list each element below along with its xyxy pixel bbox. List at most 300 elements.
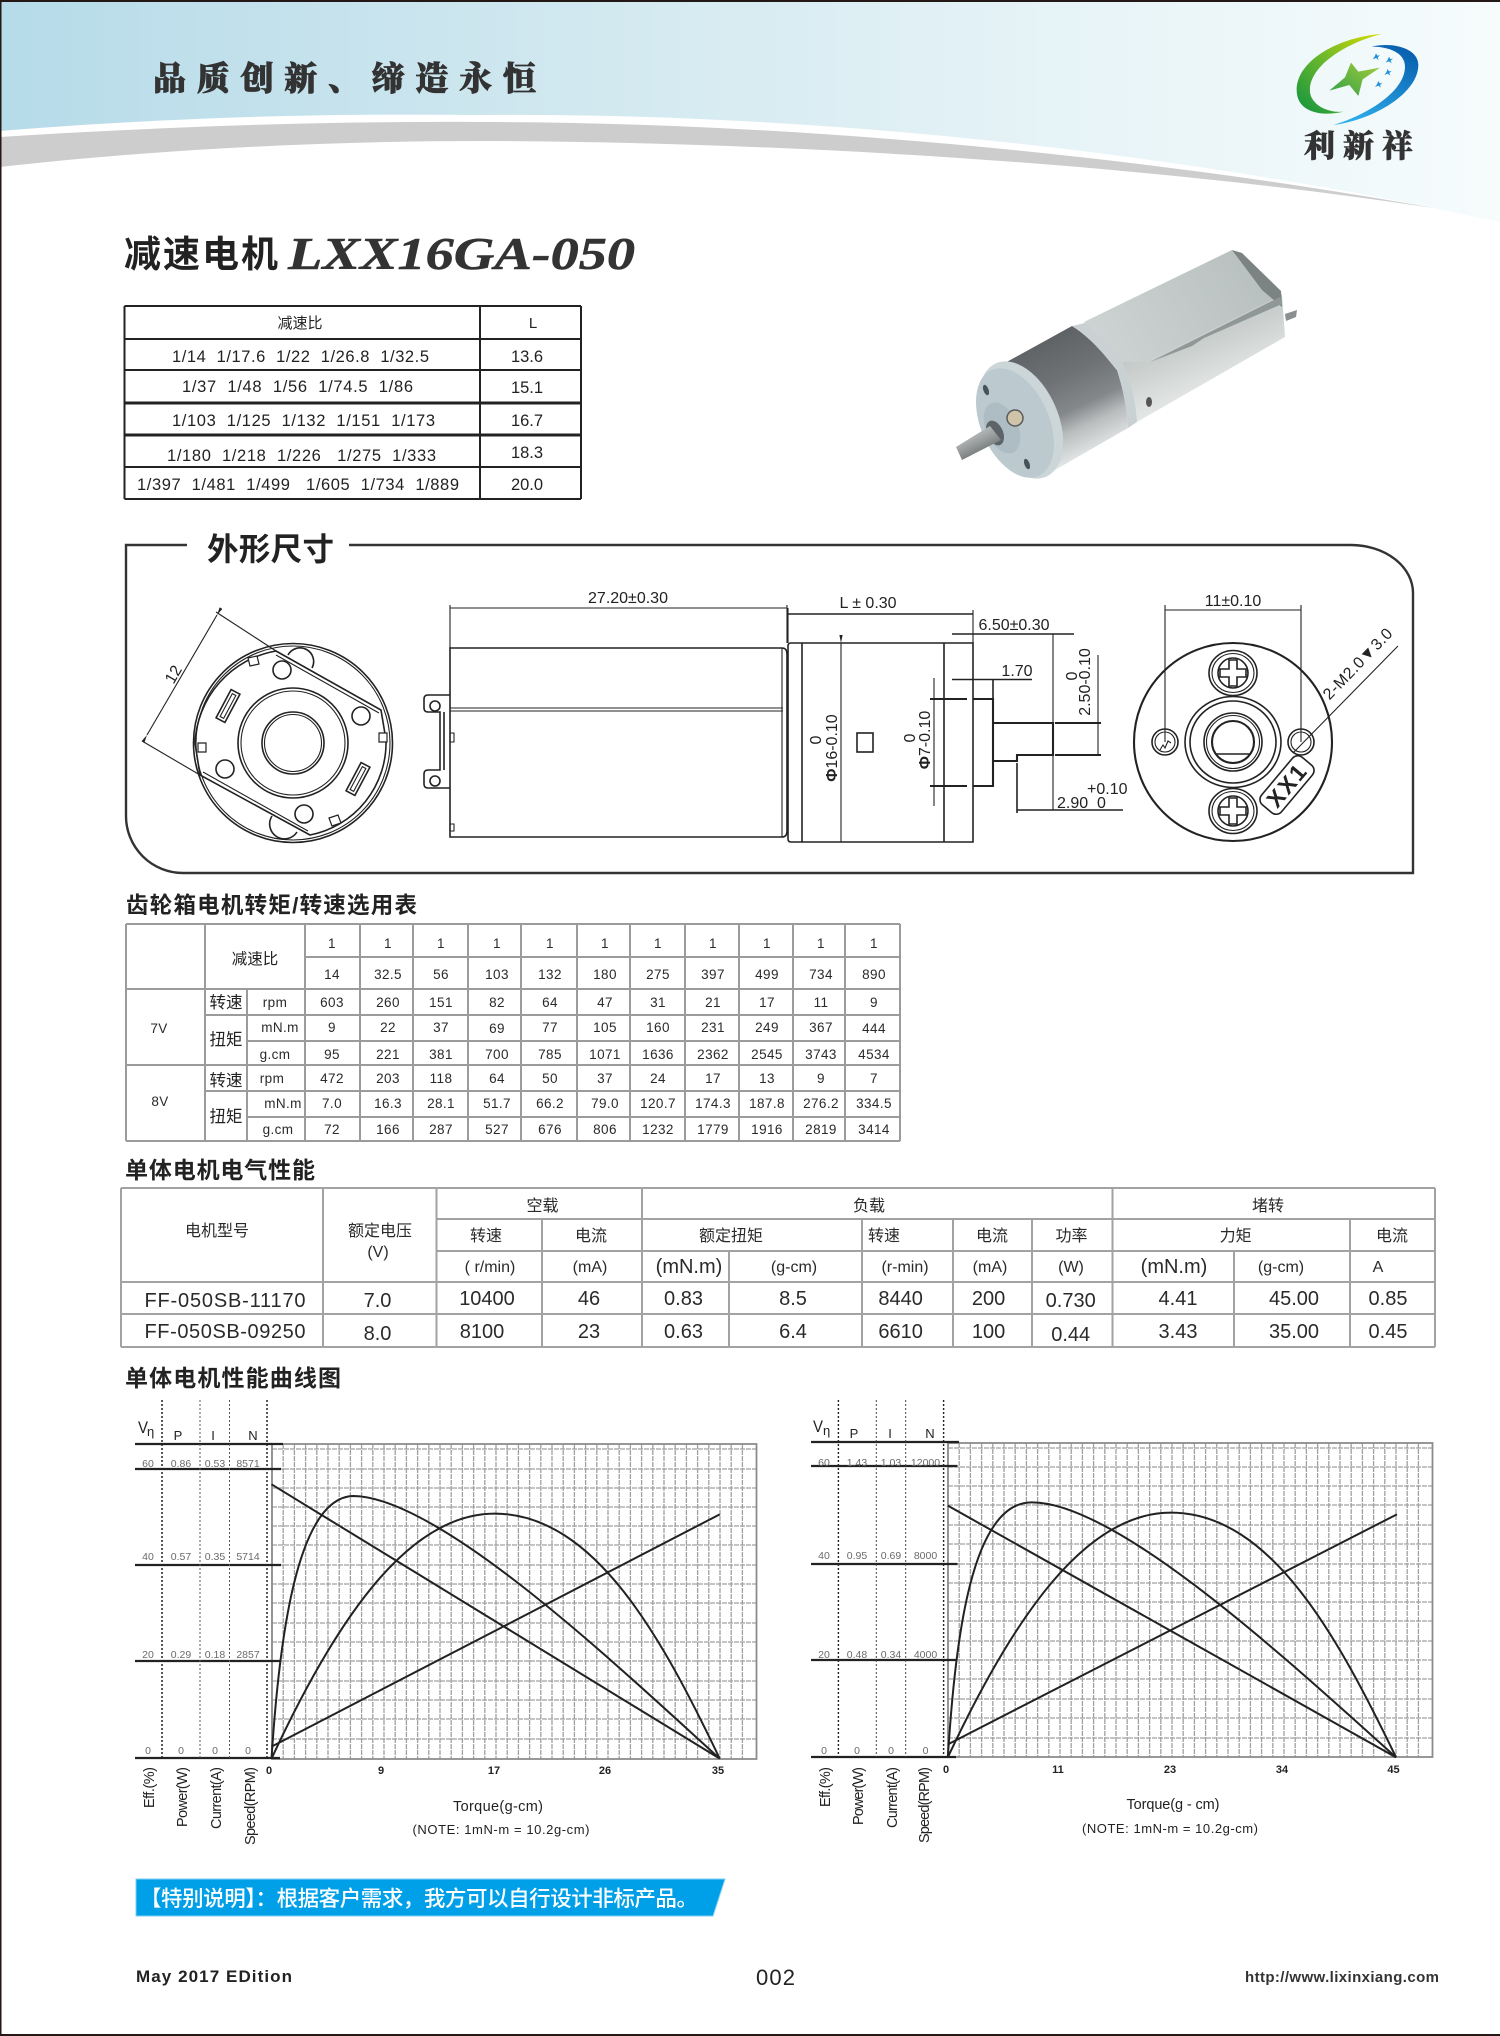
- photo: shaft: [956, 426, 1001, 460]
- table header: [277, 315, 537, 332]
- photo: rear dark edge: [1232, 250, 1282, 307]
- scale labels: [813, 1417, 940, 1757]
- scale labels: 0: [854, 1745, 860, 1757]
- rotated axis names: Current(A): [885, 1767, 901, 1828]
- scale labels: 0: [923, 1745, 929, 1757]
- row: FF-050SB-11170: [144, 1288, 1407, 1312]
- row: FF-050SB-11170: 200: [972, 1288, 1005, 1310]
- rows: 8V: 118: [430, 1071, 452, 1086]
- table header: ratios: 56: [433, 967, 449, 982]
- row: FF-050SB-11170: 0.730: [1046, 1290, 1096, 1312]
- table rows: 1/14 1/17.6 1/22 1/26.8 1/32.5: [172, 348, 429, 366]
- table header: ratios: 397: [701, 967, 725, 982]
- photo: mounting hole lower: [1023, 458, 1031, 470]
- torque axis ticks: 45: [1387, 1764, 1400, 1776]
- rows: 7V: 2545: [751, 1047, 783, 1062]
- scale labels: V: [813, 1417, 824, 1436]
- table header: ratios: 890: [862, 967, 886, 982]
- heading: gearbox selection table: 齿轮箱电机转矩/转速选用表: [126, 893, 417, 918]
- table header: ratios: 1: [546, 936, 554, 951]
- scale labels: 8571: [236, 1458, 260, 1470]
- scale labels: 60: [818, 1457, 830, 1469]
- torque axis ticks: [266, 1765, 724, 1777]
- slogan: 品质创新、缔造永恒: [153, 60, 536, 98]
- torque axis ticks: 11: [1052, 1764, 1064, 1776]
- rows: 7V: g.cm: [260, 1047, 290, 1062]
- rows: 7V: 367: [809, 1020, 833, 1035]
- bottom screw: [1209, 788, 1257, 834]
- rotated axis names: Current(A): [209, 1767, 225, 1829]
- table header: A: [1373, 1259, 1384, 1276]
- table rows: 18.3: [511, 444, 543, 462]
- panel: outline dimensions: [126, 531, 1413, 873]
- rotated axis names: Power(W): [851, 1767, 867, 1825]
- table header: ratios: 180: [593, 967, 617, 982]
- rows: 8V: 120.7: [640, 1096, 676, 1111]
- rows: 8V: 17: [705, 1071, 721, 1086]
- rows: 8V: rpm: [260, 1071, 284, 1086]
- curves: [272, 1484, 720, 1759]
- left scale lines: [135, 1400, 283, 1758]
- left scale lines: [811, 1400, 959, 1757]
- table rows: [137, 348, 543, 494]
- photo: front face: [960, 356, 1070, 490]
- scale labels: N: [248, 1428, 258, 1443]
- scale labels: I: [888, 1426, 892, 1441]
- rows: 8V: 1916: [751, 1122, 783, 1137]
- chart: performance curve 8V: [811, 1400, 1432, 1843]
- dimension: 2.90: 2.90 0: [1057, 795, 1106, 812]
- table header: ratios: 734: [809, 967, 833, 982]
- rotated axis names: [142, 1767, 259, 1845]
- rows: 7V: 11: [814, 995, 828, 1010]
- gearbox body: [788, 643, 973, 842]
- table header: 功率: [1055, 1227, 1088, 1245]
- rows: 8V: 扭矩: [210, 1107, 242, 1126]
- table header: 堵转: [1252, 1197, 1284, 1215]
- photo: ring: [1072, 323, 1137, 428]
- rotated axis names: Eff.(%): [818, 1767, 834, 1807]
- scale labels: 0.35: [205, 1551, 225, 1563]
- bearing boss: [1185, 696, 1281, 788]
- scale labels: η: [147, 1424, 154, 1439]
- table header: (g-cm): [771, 1259, 817, 1276]
- rows: 8V: g.cm: [263, 1122, 293, 1137]
- table header: (mA): [573, 1259, 607, 1276]
- rows: 7V: 785: [538, 1047, 562, 1062]
- rows: 8V: 24: [650, 1071, 666, 1086]
- panel heading: 外形尺寸: [207, 531, 334, 567]
- logo: small stars: [1373, 53, 1393, 88]
- rows: 7V: 转速: [210, 993, 242, 1012]
- rows: 7V: 37: [433, 1020, 449, 1035]
- rows: 8V: 7: [870, 1071, 878, 1086]
- heading: motor electrical performance: 单体电机电气性能: [125, 1157, 315, 1183]
- rows: 7V: 9: [870, 995, 878, 1010]
- scale labels: 4000: [914, 1649, 937, 1661]
- row: FF-050SB-11170: 7.0: [364, 1290, 391, 1312]
- rows: 7V: 1636: [642, 1047, 674, 1062]
- rows: 7V: 22: [380, 1020, 396, 1035]
- table header: 转速: [470, 1227, 502, 1245]
- table rows: 13.6: [511, 348, 543, 366]
- row: FF-050SB-09250: 6610: [878, 1321, 923, 1343]
- dimension: 2.90: [1017, 763, 1128, 813]
- footer: page number: 002: [756, 1965, 795, 1990]
- dimension: diameter 7: Φ7-0.10: [917, 711, 934, 769]
- rows: 8V: 50: [542, 1071, 558, 1086]
- rows: 8V: 72: [324, 1122, 340, 1137]
- dimension: 2.90: +0.10: [1087, 781, 1128, 798]
- torque caption: Torque(g-cm): [453, 1799, 543, 1815]
- table header: ( r/min): [465, 1259, 515, 1276]
- scale labels: P: [850, 1426, 858, 1441]
- row: FF-050SB-09250: 35.00: [1269, 1321, 1319, 1343]
- rows: 8V: 806: [593, 1122, 617, 1137]
- row: FF-050SB-11170: 0.85: [1369, 1288, 1407, 1310]
- table header: (g-cm): [1258, 1259, 1304, 1276]
- rows: 8V: 8V: [151, 1094, 169, 1109]
- drawing: rear view: [142, 612, 392, 842]
- rows: 7V: 2362: [697, 1047, 729, 1062]
- rows: 8V: 276.2: [803, 1096, 839, 1111]
- scale labels: P: [174, 1428, 182, 1443]
- rows: 8V: 187.8: [749, 1096, 785, 1111]
- row: FF-050SB-09250: 23: [578, 1321, 600, 1343]
- row: FF-050SB-11170: 8.5: [779, 1288, 807, 1310]
- rotated axis names: Eff.(%): [142, 1767, 158, 1808]
- scale labels: 8000: [914, 1550, 937, 1562]
- photo: mounting hole upper: [982, 384, 990, 396]
- table header: ratios: 132: [538, 967, 562, 982]
- table header: 空载: [526, 1197, 559, 1215]
- scale labels: 1.43: [847, 1457, 867, 1469]
- scale labels: 0: [145, 1745, 151, 1757]
- table header: 额定电压: [348, 1222, 412, 1240]
- rows: 7V: 47: [597, 995, 613, 1010]
- torque axis ticks: [943, 1764, 1400, 1776]
- table header: 电机型号: [185, 1222, 249, 1240]
- table header: ratios: 1: [654, 936, 662, 951]
- row: FF-050SB-09250: 100: [972, 1321, 1005, 1343]
- table header: ratios: 减速比: [232, 950, 278, 968]
- table header: ratios: 499: [755, 967, 779, 982]
- dimension: 6.50: 6.50±0.30: [978, 617, 1050, 634]
- rows: 7V: 260: [376, 995, 400, 1010]
- rows: 7V: 160: [646, 1020, 670, 1035]
- scale labels: I: [211, 1428, 215, 1443]
- dimension: hole callout: [1293, 625, 1398, 753]
- table header: ratios: 275: [646, 967, 670, 982]
- rotated axis names: Speed(RPM): [917, 1767, 933, 1843]
- dimension: 27.20: 27.20±0.30: [588, 590, 668, 607]
- table: gearbox torque and speed: [126, 924, 900, 1141]
- dimension: 2.50: 2.50-0.10: [1077, 648, 1094, 716]
- scale labels: 1.03: [881, 1457, 901, 1469]
- table rows: 1/103 1/125 1/132 1/151 1/173: [172, 412, 435, 430]
- rows: 8V: [151, 1071, 892, 1137]
- dimension: diameter 16: Φ16-0.10: [824, 714, 841, 782]
- row: FF-050SB-09250: 6.4: [779, 1321, 807, 1343]
- scale labels: 0: [888, 1745, 894, 1757]
- dimension: hole callout: 2-M2.0▼3.0: [1320, 625, 1396, 703]
- scale labels: 2857: [236, 1649, 260, 1661]
- title: [124, 229, 635, 279]
- table header: ratios: [232, 936, 886, 982]
- table rows: 16.7: [511, 412, 543, 430]
- table header: (r-min): [881, 1259, 929, 1276]
- table header: (mA): [973, 1259, 1007, 1276]
- unit note: (NOTE: 1mN-m = 10.2g-cm): [412, 1822, 590, 1837]
- rows: 8V: 287: [429, 1122, 453, 1137]
- rows: 7V: [150, 993, 890, 1062]
- title: LXX16GA-050: [287, 229, 635, 279]
- row: FF-050SB-09250: 3.43: [1159, 1321, 1197, 1343]
- table header: 减速比: [277, 315, 323, 332]
- rotated axis names: Speed(RPM): [243, 1767, 259, 1845]
- rows: 8V: mN.m: [264, 1096, 302, 1111]
- photo: hub: [976, 397, 1028, 459]
- rows: 8V: 66.2: [536, 1096, 564, 1111]
- rows: 8V: 334.5: [856, 1096, 892, 1111]
- unit note: (NOTE: 1mN-m = 10.2g-cm): [1082, 1821, 1258, 1836]
- photo: terminal pin: [1285, 310, 1297, 321]
- table header: (mN.m): [656, 1256, 722, 1278]
- output boss and shaft: [973, 699, 1053, 786]
- chart grid: [948, 1443, 1432, 1757]
- table header: ratios: 1: [817, 936, 825, 951]
- table rows: 1/397 1/481 1/499 1/605 1/734 1/889: [137, 476, 459, 494]
- table header: [185, 1197, 1408, 1278]
- table header: ratios: 14: [324, 967, 340, 982]
- table header: 力矩: [1220, 1227, 1252, 1245]
- row: FF-050SB-11170: 45.00: [1269, 1288, 1319, 1310]
- rows: 8V: 9: [817, 1071, 825, 1086]
- table header: ratios: 1: [763, 936, 771, 951]
- rows: 8V: 79.0: [591, 1096, 619, 1111]
- table header: ratios: 32.5: [374, 967, 402, 982]
- table rows: 1/180 1/218 1/226 1/275 1/333: [167, 447, 436, 465]
- scale labels: 0.29: [171, 1649, 191, 1661]
- dimension: 1.70: [952, 663, 1033, 699]
- table header: ratios: 1: [870, 936, 878, 951]
- table rows: 20.0: [511, 476, 543, 494]
- table header: (mN.m): [1141, 1256, 1207, 1278]
- footer: edition: May 2017 EDition: [136, 1967, 292, 1986]
- rows: 7V: 9: [328, 1020, 336, 1035]
- scale labels: 20: [142, 1649, 154, 1661]
- mounting holes: [1152, 729, 1314, 755]
- title: 减速电机: [124, 234, 278, 275]
- rows: 7V: 69: [489, 1021, 505, 1036]
- scale labels: N: [925, 1426, 935, 1441]
- rows: 7V: 151: [429, 995, 453, 1010]
- dimension: 12: 12: [162, 663, 186, 687]
- rows: 7V: 17: [759, 995, 775, 1010]
- table header: (V): [367, 1244, 389, 1261]
- table rows: 1/37 1/48 1/56 1/74.5 1/86: [182, 378, 413, 396]
- rows: 8V: 1232: [642, 1122, 674, 1137]
- rows: 8V: 7.0: [322, 1096, 342, 1111]
- row: FF-050SB-11170: 0.83: [664, 1288, 703, 1310]
- rows: 8V: 28.1: [427, 1096, 455, 1111]
- rows: 7V: 95: [324, 1047, 340, 1062]
- logo: green arc: [1297, 34, 1382, 114]
- top screw: [1209, 650, 1257, 696]
- motor terminals: [424, 695, 450, 788]
- torque axis ticks: 34: [1276, 1764, 1289, 1776]
- rows: 7V: 7V: [150, 1021, 168, 1036]
- rotated axis names: Power(W): [175, 1767, 191, 1827]
- table header: 电流: [1376, 1227, 1408, 1245]
- logo stamp: XX1: [1261, 758, 1313, 812]
- rows: 8V: 166: [376, 1122, 400, 1137]
- row: FF-050SB-09250: 0.63: [664, 1321, 703, 1343]
- table header: 额定扭矩: [699, 1227, 763, 1245]
- rows: 7V: 21: [705, 995, 721, 1010]
- rows: 7V: 64: [542, 995, 558, 1010]
- rotated axis names: [818, 1767, 933, 1843]
- motor photo: [956, 250, 1297, 492]
- logo: star: [1329, 63, 1380, 96]
- rows: 8V: 472: [320, 1071, 344, 1086]
- drawing: front view: [1134, 593, 1398, 841]
- rows: 8V: 203: [376, 1071, 400, 1086]
- table: motor electrical performance: [121, 1188, 1435, 1347]
- torque axis ticks: 9: [378, 1765, 384, 1777]
- header band: [0, 2, 1500, 222]
- rows: 7V: 82: [489, 995, 505, 1010]
- dimension: 11: 11±0.10: [1205, 593, 1261, 610]
- scale labels: 0: [212, 1745, 218, 1757]
- row: FF-050SB-09250: 0.44: [1051, 1324, 1090, 1346]
- rows: 7V: 603: [320, 995, 344, 1010]
- row: FF-050SB-11170: FF-050SB-11170: [144, 1290, 306, 1312]
- torque caption: Torque(g - cm): [1126, 1797, 1220, 1813]
- rows: 7V: rpm: [263, 995, 287, 1010]
- torque axis ticks: 35: [712, 1765, 724, 1777]
- table header: L: [529, 315, 537, 332]
- curves: [948, 1502, 1397, 1757]
- row: FF-050SB-09250: FF-050SB-09250: [144, 1321, 306, 1343]
- photo: front rim: [962, 348, 1080, 492]
- table header: ratios: 1: [328, 936, 336, 951]
- rows: 8V: 174.3: [695, 1096, 731, 1111]
- rows: 8V: 13: [759, 1071, 775, 1086]
- rows: 8V: 16.3: [374, 1096, 402, 1111]
- scale labels: 0.48: [847, 1649, 867, 1661]
- rows: 7V: 3743: [805, 1047, 837, 1062]
- rows: 7V: 231: [701, 1020, 725, 1035]
- chart grid: [272, 1444, 756, 1759]
- photo: motor top face: [1084, 250, 1282, 372]
- table header: ratios: 1: [437, 936, 445, 951]
- scale labels: 0.69: [881, 1550, 901, 1562]
- table header: (W): [1058, 1259, 1084, 1276]
- rows: 8V: 3414: [858, 1122, 890, 1137]
- scale labels: 60: [142, 1458, 154, 1470]
- table rows: 15.1: [511, 379, 543, 397]
- table: reduction ratio vs length: [124, 306, 581, 499]
- dimension: L: L ± 0.30: [839, 595, 897, 612]
- callout banner: 【特别说明】：根据客户需求，我方可以自行设计非标产品。: [140, 1887, 698, 1911]
- photo: ridge shadow: [1150, 297, 1282, 362]
- rows: 8V: 转速: [210, 1071, 242, 1090]
- heading: motor performance curves: 单体电机性能曲线图: [125, 1365, 341, 1391]
- dimension: diameter 16: [808, 643, 841, 842]
- motor can: [450, 648, 787, 837]
- dimension: 2.50: 0: [1064, 671, 1081, 680]
- rows: 8V: 64: [489, 1071, 505, 1086]
- callout banner: [136, 1879, 725, 1916]
- scale labels: 0.18: [205, 1649, 225, 1661]
- table header: ratios: 1: [384, 936, 392, 951]
- dimension: L: [788, 595, 973, 643]
- scale labels: 0.95: [847, 1550, 867, 1562]
- table header: ratios: 103: [485, 967, 509, 982]
- logo: blue arc: [1333, 45, 1418, 125]
- table header: 电流: [575, 1227, 607, 1245]
- rows: 8V: 2819: [805, 1122, 837, 1137]
- dimension: 11: [1165, 593, 1301, 742]
- row: FF-050SB-11170: 10400: [459, 1288, 515, 1310]
- rows: 7V: 700: [485, 1047, 509, 1062]
- dimension: 1.70: 1.70: [1001, 663, 1033, 680]
- drawing: side view: [424, 590, 1128, 842]
- row: FF-050SB-09250: 8100: [460, 1321, 504, 1343]
- rows: 7V: 381: [429, 1047, 453, 1062]
- footer: website: http://www.lixinxiang.com: [1245, 1969, 1439, 1986]
- dimension: 27.20: [450, 590, 787, 648]
- torque axis ticks: 23: [1164, 1764, 1176, 1776]
- torque axis ticks: 26: [599, 1765, 611, 1777]
- dimension: diameter 7: [902, 678, 967, 806]
- logo: company name: 利新祥: [1304, 129, 1413, 164]
- scale labels: 20: [818, 1649, 830, 1661]
- rows: 7V: 77: [542, 1020, 558, 1035]
- scale labels: η: [823, 1423, 830, 1438]
- torque axis ticks: 17: [488, 1765, 500, 1777]
- rows: 8V: 676: [538, 1122, 562, 1137]
- rows: 7V: 1071: [589, 1047, 621, 1062]
- photo: motor side face: [1120, 295, 1285, 422]
- photo: gearbox: [1003, 326, 1128, 470]
- scale labels: 0: [245, 1745, 251, 1757]
- rows: 7V: 扭矩: [210, 1030, 242, 1049]
- photo: screw: [1007, 410, 1023, 426]
- photo: shaft hole: [982, 418, 1008, 448]
- scale labels: 40: [142, 1551, 154, 1563]
- table header: ratios: 1: [493, 936, 501, 951]
- dimension: 2.50: [1055, 648, 1101, 755]
- scale labels: 5714: [236, 1551, 260, 1563]
- scale labels: 0: [178, 1745, 184, 1757]
- scale labels: V: [138, 1418, 149, 1437]
- dimension: 12: [142, 612, 276, 775]
- row: FF-050SB-09250: 8.0: [364, 1323, 391, 1345]
- rows: 7V: 4534: [858, 1047, 890, 1062]
- rows: 8V: 527: [485, 1122, 509, 1137]
- table header: ratios: 1: [709, 936, 717, 951]
- rows: 8V: 1779: [697, 1122, 729, 1137]
- table header: 负载: [853, 1197, 885, 1215]
- dimension: diameter 16: 0: [808, 735, 825, 744]
- rows: 8V: 37: [597, 1071, 613, 1086]
- dimension: diameter 7: 0: [902, 733, 919, 742]
- row: FF-050SB-11170: 4.41: [1159, 1288, 1197, 1310]
- scale labels: 0: [821, 1745, 827, 1757]
- scale labels: 0.53: [205, 1458, 225, 1470]
